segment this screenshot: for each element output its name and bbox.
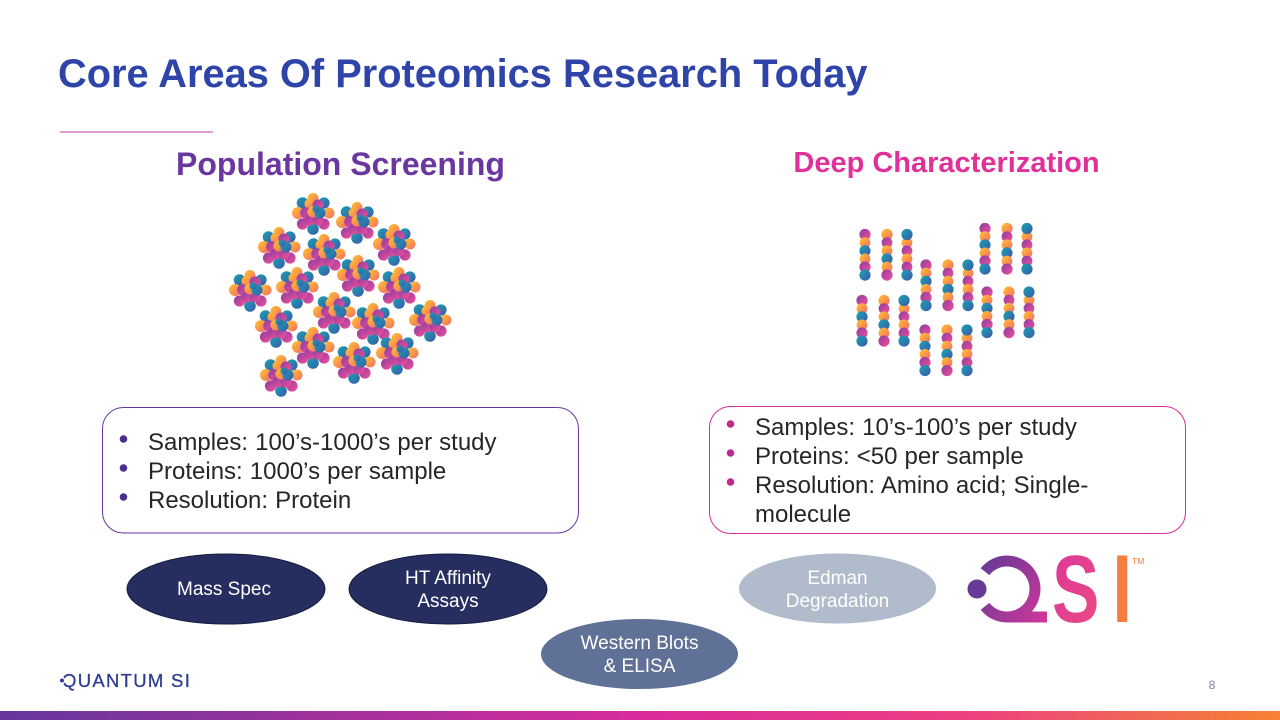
- logo: QSI: TM: [1132, 556, 1144, 566]
- logo: QSI: [968, 534, 1144, 643]
- bullet list: deep characterization: [727, 414, 1088, 528]
- page number: 8: [1209, 678, 1216, 692]
- bullet list: population screening: [120, 429, 497, 514]
- bullet list: deep characterization: molecule: [755, 501, 851, 528]
- heading: Deep Characterization: Deep Characterization: [793, 147, 1100, 179]
- bullet list: deep characterization: Samples: 10’s-100’s per study: [755, 414, 1077, 441]
- panel: deep characterization details: [710, 406, 1186, 534]
- bullet list: deep characterization: Proteins: <50 per sample: [755, 443, 1024, 470]
- title: Core Areas Of Proteomics Research Today: [58, 52, 868, 96]
- logo: QSI: I: [1112, 534, 1132, 643]
- method: Edman Degradation: Edman: [807, 568, 868, 589]
- method: Western Blots and ELISA: Western Blots: [581, 633, 698, 654]
- bullet list: deep characterization: Resolution: Amino acid; Single-: [755, 472, 1088, 499]
- method: Western Blots and ELISA: [541, 619, 738, 689]
- icon: protein cluster illustration: [229, 193, 452, 397]
- icon: peptide strands illustration: [856, 223, 1035, 376]
- method: Mass Spec: Mass Spec: [177, 579, 271, 600]
- bullet list: population screening: Resolution: Protein: [148, 487, 351, 514]
- title underline: [60, 132, 213, 133]
- bullet list: population screening: Samples: 100’s-1000’s per study: [148, 429, 497, 456]
- logo: Quantum SI footer: QUANTUM SI: [62, 670, 191, 691]
- bullet list: population screening: Proteins: 1000’s per sample: [148, 458, 446, 485]
- heading: Population Screening: Population Screening: [176, 146, 505, 182]
- method: HT Affinity Assays: Assays: [417, 591, 479, 612]
- method: Edman Degradation: Degradation: [786, 591, 889, 612]
- panel: population screening details: [102, 408, 578, 533]
- footer gradient bar: [0, 711, 1280, 720]
- method: Mass Spec: [127, 554, 325, 624]
- method: Edman Degradation: [739, 554, 936, 624]
- logo: QSI: S: [1052, 536, 1099, 642]
- method: HT Affinity Assays: HT Affinity: [405, 568, 491, 589]
- method: Western Blots and ELISA: & ELISA: [604, 656, 676, 677]
- method: HT Affinity Assays: [349, 554, 547, 624]
